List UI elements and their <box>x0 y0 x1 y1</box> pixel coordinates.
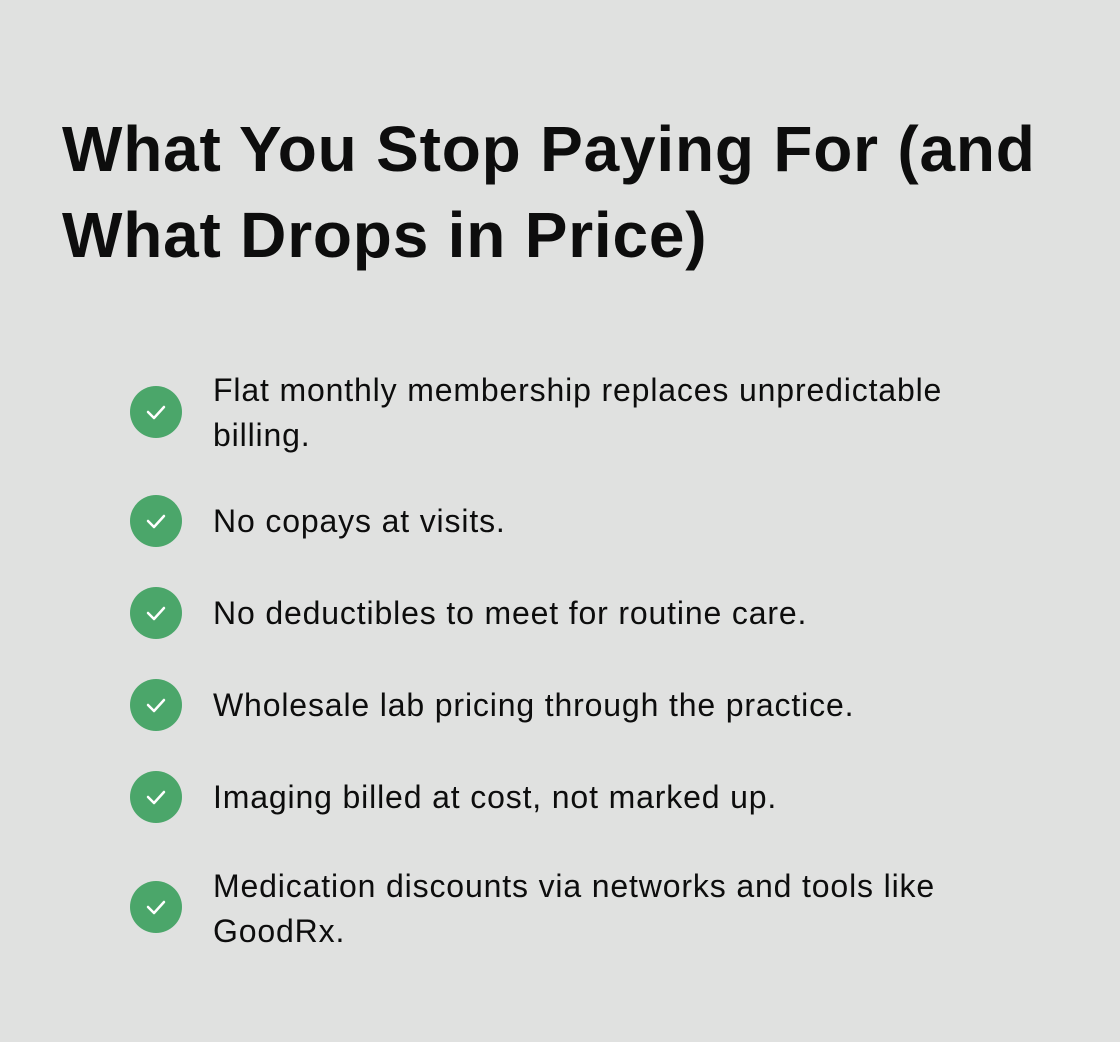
text: GoodRx. <box>213 913 345 949</box>
text <box>213 372 942 453</box>
icon: check <box>130 771 182 823</box>
title: What You Stop Paying For (and <box>62 113 1036 185</box>
list item 6 <box>130 868 935 949</box>
icon: check <box>130 881 182 933</box>
icon: check <box>130 386 182 438</box>
list item 3 <box>130 587 807 639</box>
text <box>213 868 935 949</box>
text: Wholesale lab pricing through the practice. <box>213 687 854 723</box>
icon: check <box>130 587 182 639</box>
text: billing. <box>213 417 311 453</box>
list item 5 <box>130 771 777 823</box>
text: Imaging billed at cost, not marked up. <box>213 779 777 815</box>
list item 2 <box>130 495 506 547</box>
text: No deductibles to meet for routine care. <box>213 595 807 631</box>
title: What Drops in Price) <box>62 199 707 271</box>
list item 1 <box>130 372 942 453</box>
icon: check <box>130 679 182 731</box>
text: Medication discounts via networks and tools like <box>213 868 935 904</box>
text: No copays at visits. <box>213 503 506 539</box>
text: Flat monthly membership replaces unpredictable <box>213 372 942 408</box>
list item 4 <box>130 679 854 731</box>
icon: check <box>130 495 182 547</box>
title <box>62 113 1036 271</box>
